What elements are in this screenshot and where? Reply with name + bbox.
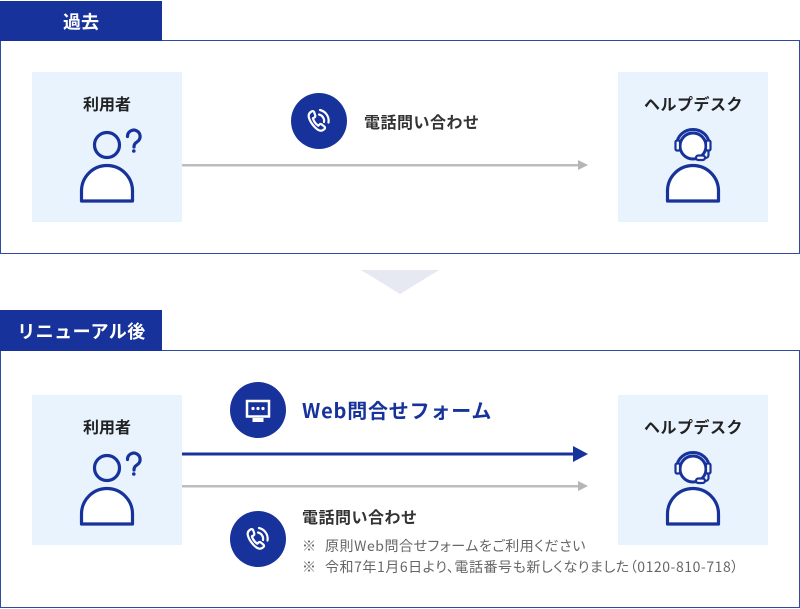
tab: リニューアル後: [0, 310, 162, 351]
label: web form: Web問合せフォーム: [302, 395, 492, 424]
icon: user with question mark: [82, 453, 140, 524]
tab: リニューアル後: リニューアル後: [17, 318, 146, 344]
arrow: phone route: [182, 481, 588, 491]
icon: web form monitor: [230, 382, 286, 438]
icon: user with question mark: [82, 130, 140, 201]
arrow: phone route: [182, 160, 588, 170]
arrow: transition triangle: [361, 270, 439, 294]
arrow: web form route: [182, 446, 588, 462]
icon: phone: [291, 93, 347, 149]
label: phone inquiry: 電話問い合わせ: [302, 504, 418, 528]
icon: headset operator: [668, 452, 718, 524]
label: user: 利用者: [83, 414, 131, 438]
notes: ※: [302, 557, 316, 577]
label: phone inquiry: 電話問い合わせ: [364, 109, 480, 133]
panel: help desk box: [618, 395, 768, 545]
panel: リニューアル後: [0, 350, 800, 608]
notes: 原則Web問合せフォームをご利用ください: [325, 536, 586, 556]
tab: 過去: 過去: [63, 8, 99, 34]
panel: help desk box: [618, 72, 768, 222]
icon: phone: [230, 511, 286, 567]
tab: 過去: [0, 1, 162, 41]
label: help desk: ヘルプデスク: [644, 91, 743, 115]
label: user: 利用者: [83, 91, 131, 115]
panel: user box: [32, 72, 182, 222]
icon: headset operator: [668, 130, 718, 201]
notes: [302, 536, 739, 577]
panel: 過去: [0, 40, 800, 254]
notes: ※: [302, 536, 316, 556]
label: help desk: ヘルプデスク: [644, 414, 743, 438]
notes: 令和7年1月6日より、電話番号も新しくなりました（0120-810-718）: [325, 557, 739, 577]
panel: user box: [32, 395, 182, 545]
